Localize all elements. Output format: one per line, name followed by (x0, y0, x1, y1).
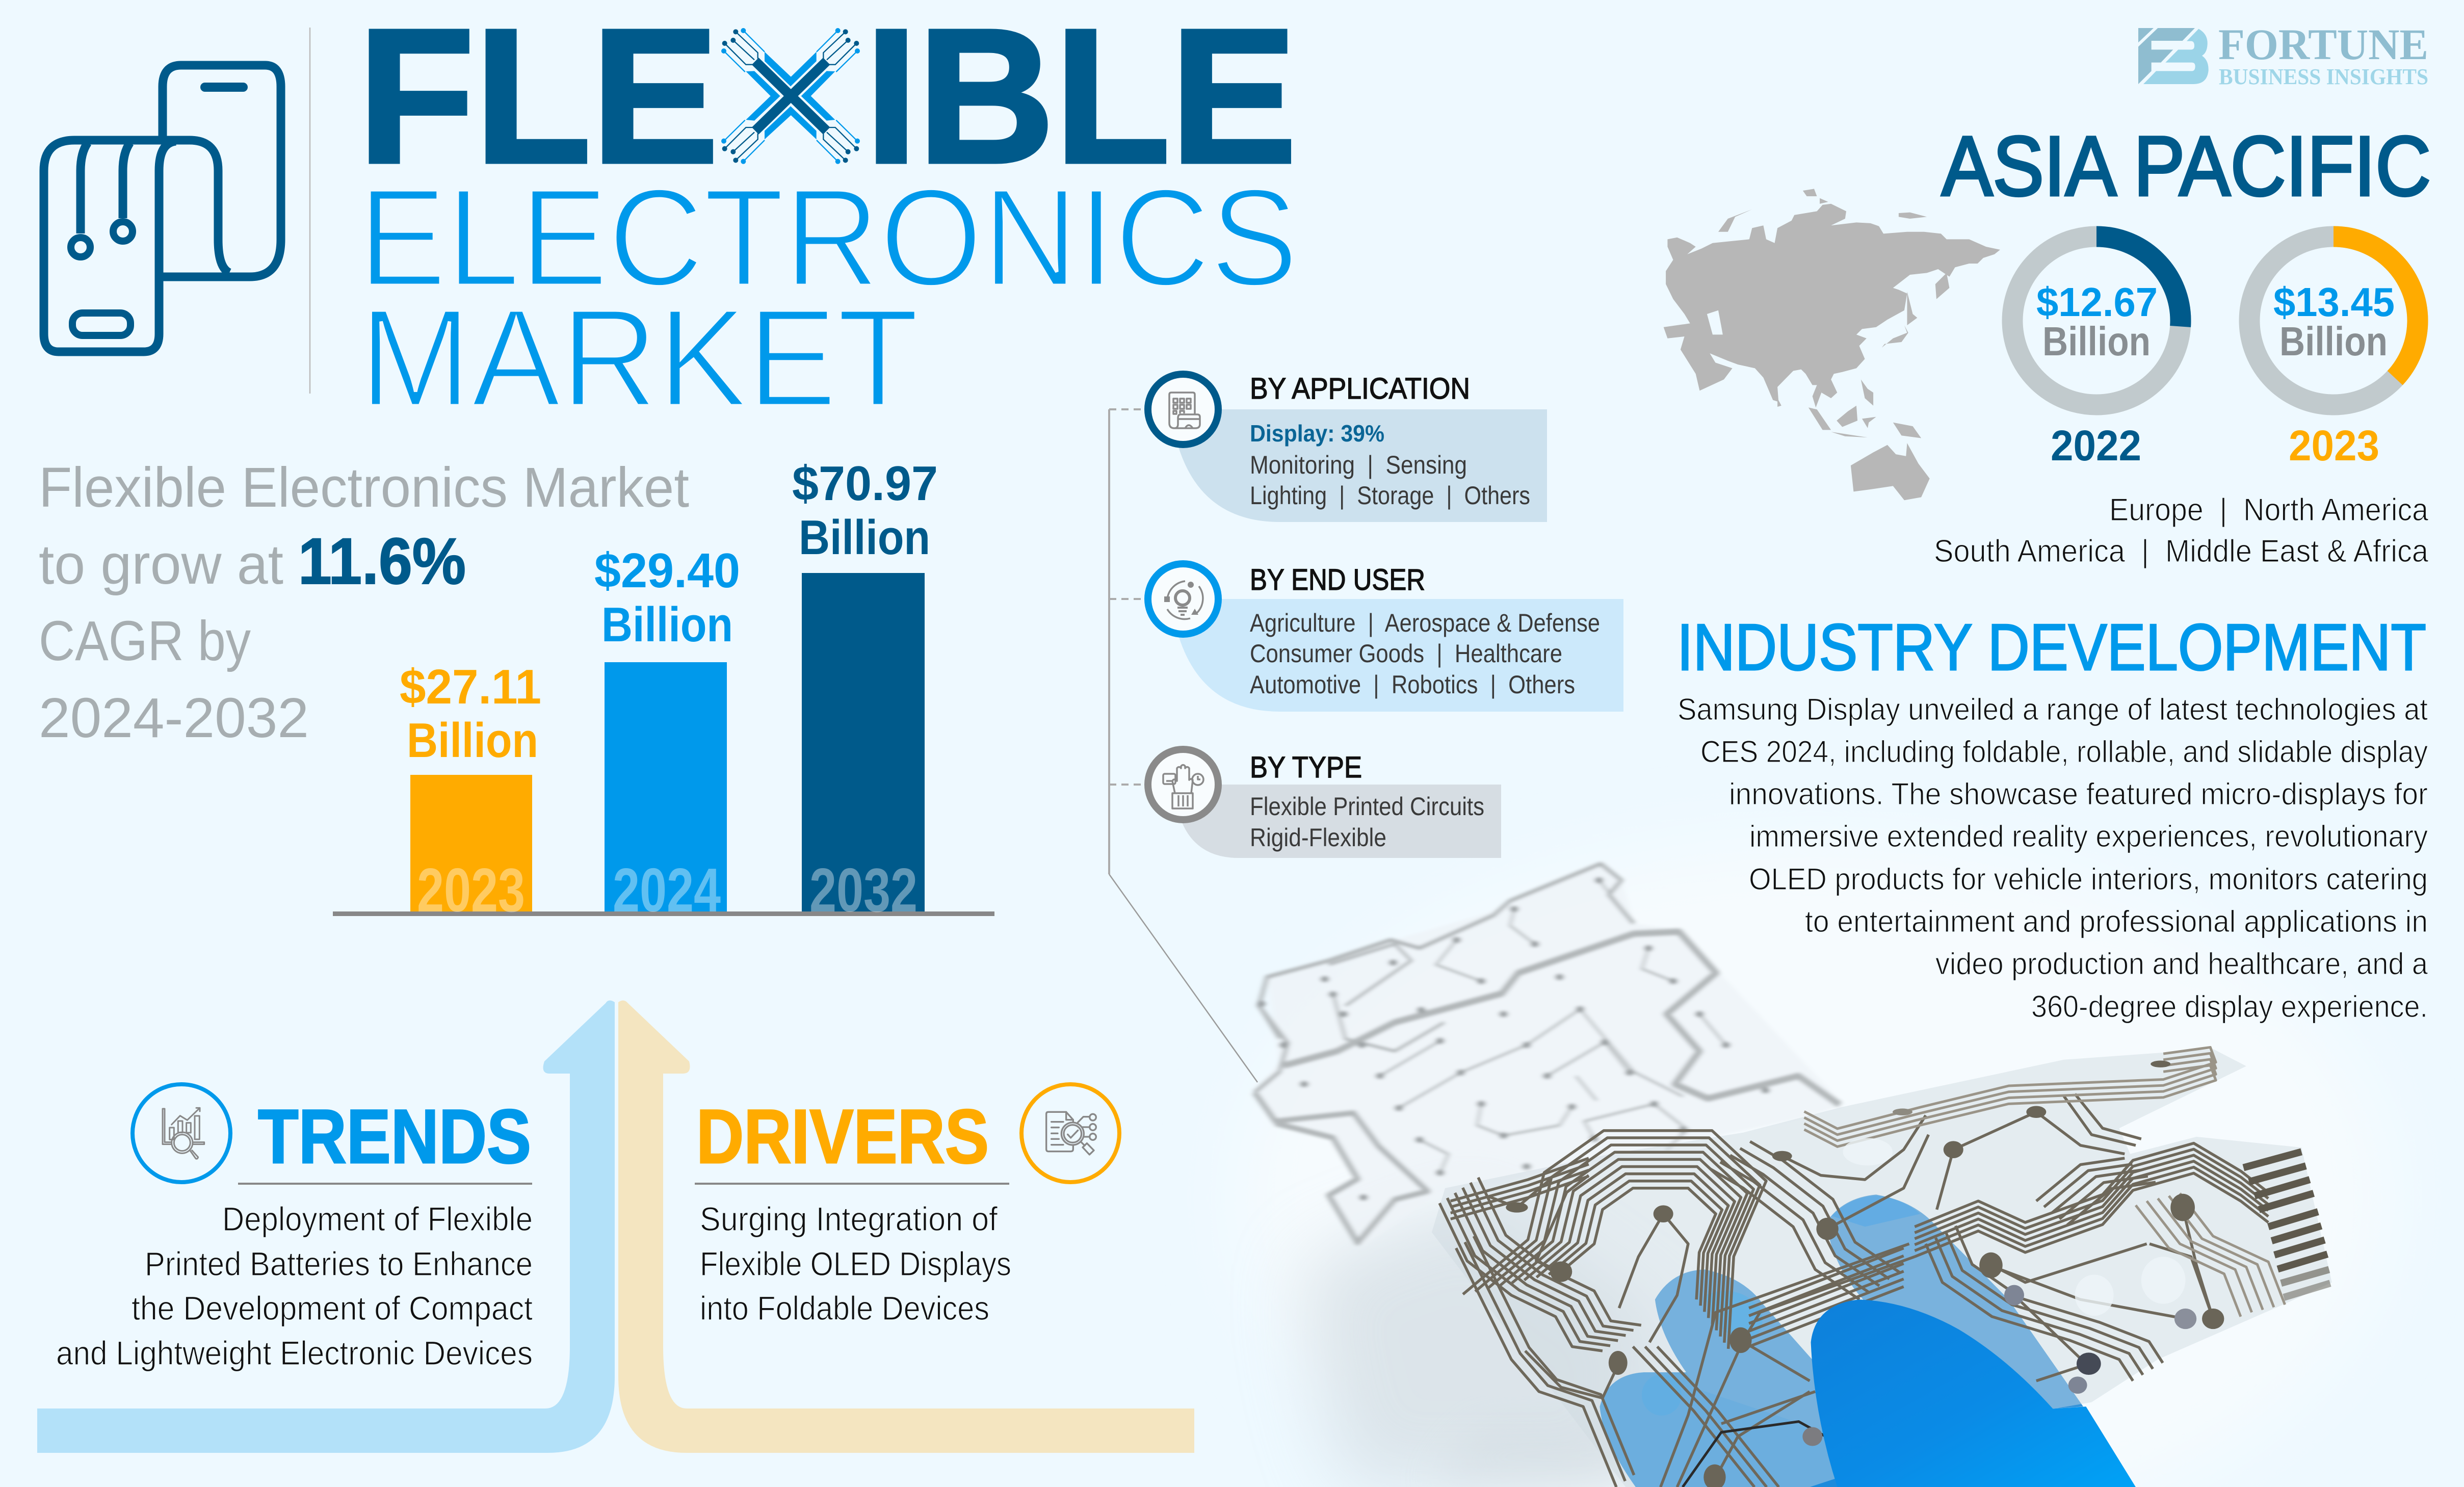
segment: by end user: Automotive | Robotics | Others (1250, 670, 1575, 699)
text: drivers: into Foldable Devices (700, 1289, 989, 1327)
text: drivers (700, 1200, 1011, 1327)
donut chart: 2023: $13.45 (2273, 279, 2395, 325)
bar year labels: 2023 (417, 855, 525, 925)
segment: by application: BY APPLICATION (1250, 372, 1470, 405)
segment: by application: Monitoring | Sensing (1250, 451, 1467, 479)
title: MARKET: MARKET (359, 280, 919, 435)
map: Asia Pacific (1664, 189, 2000, 500)
round solder pads (1506, 1060, 2224, 1487)
text block: industry development: 360-degree display experience. (2031, 989, 2428, 1024)
bar chart (333, 456, 994, 925)
donut chart: 2022 (2012, 237, 2181, 469)
logo: Fortune Business Insights: BUSINESS INSIGHTS (2219, 64, 2428, 89)
icon: circuit X (721, 28, 860, 164)
text block: industry development (1677, 692, 2428, 1024)
title: ELECTRONICS: ELECTRONICS (358, 160, 1298, 315)
segment: by type: Flexible Printed Circuits (1250, 792, 1484, 821)
connector line to photo (1109, 409, 1257, 1082)
other regions: South America | Middle East & Africa (1934, 534, 2428, 569)
text: trends: Deployment of Flexible (222, 1200, 533, 1238)
heading: drivers: DRIVERS (696, 1093, 989, 1179)
CAGR statement: to grow at (39, 533, 283, 596)
text: drivers: Surging Integration of (700, 1200, 998, 1238)
CAGR statement: 11.6% (298, 525, 466, 598)
glove: rear fingers (1600, 1194, 2083, 1487)
donut chart: 2023: Billion (2279, 319, 2388, 364)
text block: industry development: video production and healthcare, and a (1935, 947, 2428, 981)
bar 2024 (605, 662, 727, 911)
bar 2023 (410, 775, 532, 911)
value label 2024: Billion (601, 597, 733, 652)
segment: by application: Lighting | Storage | Others (1250, 481, 1530, 510)
back sheet with blurred traces (1255, 864, 1844, 1247)
segment: by end user (1148, 563, 1623, 712)
arrow: trends (37, 1000, 615, 1453)
front sheet (1432, 1049, 2332, 1487)
axis (333, 911, 994, 916)
text: trends: and Lightweight Electronic Devices (56, 1334, 533, 1372)
text block: industry development: innovations. The showcase featured micro-displays for (1729, 777, 2428, 811)
text: trends (56, 1200, 533, 1372)
segment: by type: BY TYPE (1250, 751, 1362, 784)
icon: bulb with gear (1164, 581, 1203, 619)
value label 2032: Billion (799, 510, 930, 565)
text block: industry development: OLED products for vehicle interiors, monitors catering (1749, 862, 2428, 896)
text: drivers: Flexible OLED Displays (700, 1245, 1011, 1283)
title: FLEXIBLE (358, 0, 1297, 203)
glove and front sheet (1432, 1047, 2332, 1487)
circuit traces (1439, 1094, 2268, 1487)
donut chart: 2023: 2023 (2289, 422, 2379, 469)
CAGR statement: Flexible Electronics Market (39, 456, 689, 519)
donut chart: 2022: $12.67 (2036, 279, 2158, 325)
text: trends: the Development of Compact (132, 1289, 533, 1327)
value label 2032 (792, 456, 938, 565)
logo: Fortune Business Insights: FORTUNE (2218, 20, 2428, 69)
CAGR statement: 2024-2032 (39, 687, 309, 749)
value label 2023: $27.11 (400, 660, 541, 714)
bar year labels: 2032 (809, 855, 918, 925)
trends panel (56, 1084, 533, 1372)
icon: foldable phones (44, 65, 281, 352)
drivers panel (695, 1084, 1119, 1327)
segment: by type: Rigid-Flexible (1250, 823, 1386, 852)
connector pads (2243, 1152, 2330, 1297)
heading: trends: TRENDS (258, 1093, 531, 1179)
value label 2023 (400, 660, 541, 768)
text block: industry development: immersive extended reality experiences, revolutionary (1749, 819, 2428, 853)
text block: industry development: Samsung Display unveiled a range of latest technologies at (1677, 692, 2428, 726)
segment: by type (1148, 749, 1501, 858)
donut chart: 2022: 2022 (2051, 422, 2141, 469)
segment: by application (1148, 372, 1547, 522)
title divider (309, 28, 310, 394)
bar year labels (417, 855, 918, 925)
donut chart: 2022: Billion (2042, 319, 2151, 364)
other regions: Europe | North America (2109, 492, 2428, 528)
icon: chart with magnifier (133, 1084, 230, 1182)
text block: industry development: to entertainment and professional applications in (1805, 904, 2428, 938)
map: Australia (1851, 443, 1930, 500)
segment: by end user: Consumer Goods | Healthcare (1250, 639, 1562, 668)
photo: flexible circuit sheet held by blue-gloved hand (1239, 841, 2391, 1487)
value label 2032: $70.97 (792, 456, 938, 511)
logo: Fortune Business Insights (2138, 20, 2428, 89)
icon: FB mark (2138, 28, 2209, 84)
arrow: drivers (618, 1000, 1194, 1453)
donut chart: 2023 (2249, 237, 2418, 469)
icon: phone and card (1169, 393, 1200, 428)
value label 2024: $29.40 (594, 543, 740, 598)
CAGR statement: CAGR by (39, 610, 251, 672)
segment: by end user: Agriculture | Aerospace & Defense (1250, 609, 1600, 637)
bar year labels: 2024 (613, 855, 721, 925)
icon: document with magnifier (1021, 1084, 1119, 1182)
holes in sheet (1843, 1138, 2186, 1316)
value label 2024 (594, 543, 740, 652)
icon: hand and wearable (1163, 765, 1203, 808)
value label 2023: Billion (407, 713, 538, 768)
glove: front thumb (1811, 1299, 2136, 1487)
text: trends: Printed Batteries to Enhance (145, 1245, 533, 1283)
bar 2032 (802, 573, 925, 911)
CAGR statement (39, 456, 689, 749)
segment: by end user: BY END USER (1250, 563, 1425, 596)
other regions (1934, 492, 2428, 569)
segment: by application: Display: 39% (1250, 420, 1384, 447)
